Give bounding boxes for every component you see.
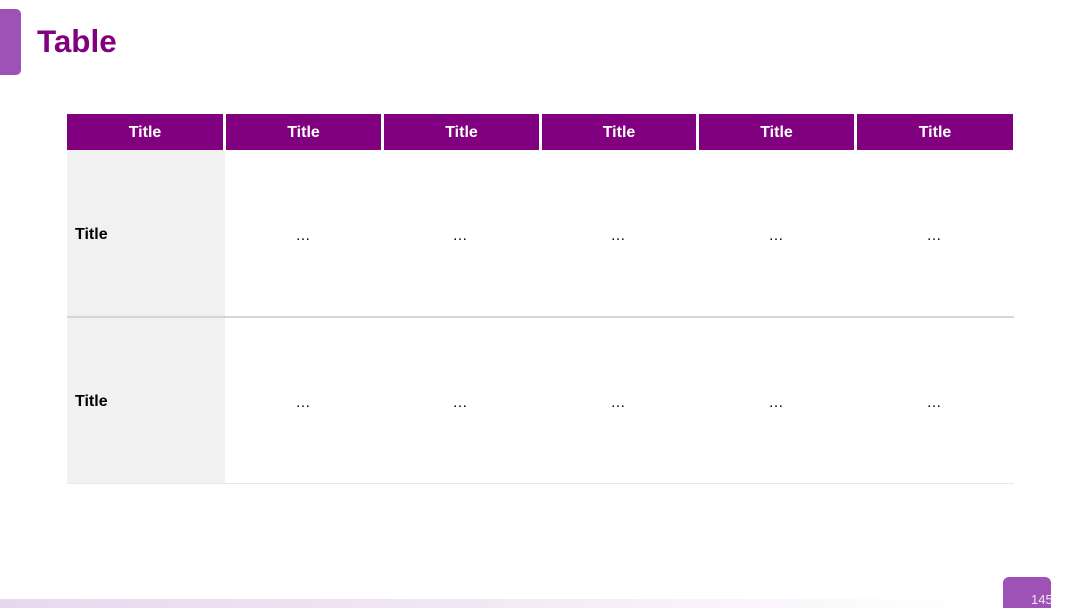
row 2 cell 3: … [610, 394, 626, 411]
column header 6: Title [919, 124, 951, 141]
row divider [67, 316, 1014, 318]
row 2 cell 1: … [296, 394, 310, 411]
row 1 cell 3: … [610, 227, 626, 244]
column header 2 [226, 114, 381, 150]
column header 1: Title [129, 124, 161, 141]
column header 4: Title [603, 124, 635, 141]
page number tab [1003, 577, 1051, 608]
row 2 cell 2: … [452, 394, 468, 411]
row 2 cell 4: … [768, 394, 784, 411]
row 1 cell 1: … [296, 227, 310, 244]
column header 5: Title [760, 124, 793, 141]
column header 2: Title [287, 124, 320, 141]
column header 3: Title [445, 124, 478, 141]
row 1 cell 4: … [768, 227, 784, 244]
row 1 cell 5: … [926, 227, 942, 244]
bottom gradient band [0, 599, 1080, 608]
column header 4 [542, 114, 696, 150]
column header 1 [67, 114, 223, 150]
table [67, 150, 225, 483]
table bottom border [67, 483, 1014, 484]
row 1 heading: Title [75, 226, 108, 243]
column header 3 [384, 114, 539, 150]
row 1 cell 2: … [452, 227, 468, 244]
row heading backgrounds [67, 150, 225, 483]
row 2 heading: Title [75, 393, 108, 410]
column header 6 [857, 114, 1013, 150]
header accent tab [0, 9, 21, 75]
title: Table [37, 24, 117, 59]
row 2 cell 5: … [926, 394, 942, 411]
column header 5 [699, 114, 854, 150]
